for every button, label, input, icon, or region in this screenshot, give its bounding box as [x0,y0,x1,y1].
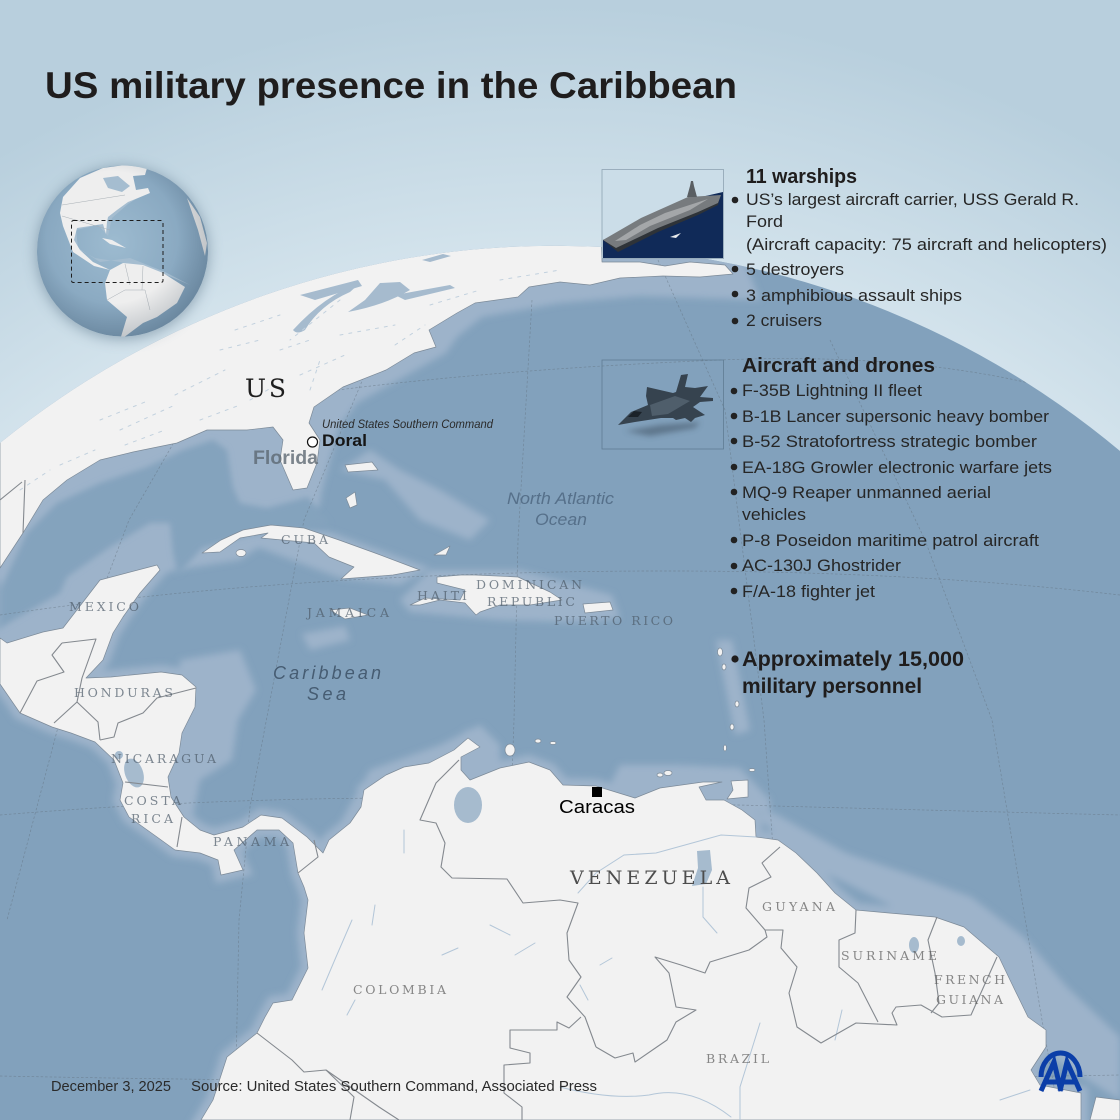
footer date and source: Source: United States Southern Command, Associated Press [191,1079,597,1095]
marker: Doral, United States Southern Command [308,419,494,450]
warship list: (Aircraft capacity: 75 aircraft and helicopters) [746,235,1107,254]
Trinidad [727,780,748,799]
aircraft list: AC-130J Ghostrider [742,556,901,575]
Hispaniola [410,575,562,615]
heading: 11 warships [746,166,857,188]
label: Dominican Republic: REPUBLIC [487,594,575,609]
label: Haiti: HAITI [417,588,467,603]
label: French Guiana: GUIANA [936,992,1004,1007]
marker: Doral, United States Southern Command: Doral [322,432,367,450]
callout: personnel: Approximately 15,000 [742,648,964,671]
Puerto Rico [583,602,613,613]
panel: warships [602,166,1107,330]
rivers and small lakes [20,270,1030,1120]
label: French Guiana [934,972,1005,1007]
warship list: 5 destroyers [746,260,844,279]
label: French Guiana: FRENCH [934,972,1005,987]
inset locator globe [36,165,208,340]
label: US: US [245,374,286,403]
graticule [0,260,1120,1120]
callout: personnel: military personnel [742,675,922,698]
aircraft list: EA-18G Growler electronic warfare jets [742,458,1052,477]
label: Costa Rica: COSTA [124,793,182,808]
footer date and source: December 3, 2025 [51,1079,171,1095]
aircraft list: F/A-18 fighter jet [742,582,875,601]
label: Dominican Republic [476,577,582,609]
label: Cuba: CUBA [281,532,329,547]
label: Brazil: BRAZIL [706,1051,769,1066]
deep Gulf of Mexico basin [0,440,330,628]
landmass: Central and South America [0,565,1081,1120]
globe shadow [36,167,208,339]
warship list: 3 amphibious assault ships [746,286,962,305]
islands [202,462,1120,1120]
label: Caribbean Sea: Sea [307,684,346,704]
label: Honduras: HONDURAS [74,685,173,700]
warship list: 2 cruisers [746,311,822,330]
heading: Aircraft and drones [742,355,935,377]
label: Puerto Rico: PUERTO RICO [554,613,673,628]
title: US military presence in the Caribbean [45,65,737,106]
lakes [115,254,965,953]
Marajo island [1090,1097,1120,1120]
aircraft list: B-1B Lancer supersonic heavy bomber [742,407,1049,426]
label: Colombia: COLOMBIA [353,982,447,997]
warship list: Ford [746,212,783,231]
label: Costa Rica: RICA [131,811,174,826]
label: Guyana: GUYANA [762,899,836,914]
aircraft list: P-8 Poseidon maritime patrol aircraft [742,531,1039,550]
warship list [732,190,1107,330]
Jamaica [330,608,368,619]
fighter jet photo [602,360,724,449]
marker: Doral, United States Southern Command: United States Southern Command [322,419,494,431]
aircraft list: vehicles [742,505,806,524]
aircraft list [731,381,1052,601]
label: Mexico: MEXICO [69,599,139,614]
label: Suriname: SURINAME [841,948,937,963]
warship list: US’s largest aircraft carrier, USS Gerald R. [746,190,1079,209]
marker: Caracas: Caracas [559,797,635,817]
label: Panama: PANAMA [213,834,290,849]
marker: Caracas [559,787,635,817]
label: Costa Rica [124,793,182,826]
country borders [0,480,997,1120]
label: North Atlantic Ocean [507,489,615,529]
label: Jamaica: JAMAICA [305,605,390,620]
label: Venezuela: VENEZUELA [569,867,730,889]
aircraft list: F-35B Lightning II fleet [742,381,922,400]
logo: AA [1041,1053,1080,1091]
carrier photo [602,170,724,258]
deep ocean [0,240,1120,1120]
Cuba [202,525,420,579]
label: Nicaragua: NICARAGUA [111,751,217,766]
small islands and Bahamas [236,550,246,556]
landmass: North America [0,246,734,568]
label: Caribbean Sea [273,663,381,704]
label: North Atlantic Ocean: Ocean [535,510,587,529]
map labels [69,374,1005,1066]
label: Florida: Florida [253,448,318,469]
label: Caribbean Sea: Caribbean [273,663,381,683]
aircraft list: B-52 Stratofortress strategic bomber [742,432,1037,451]
dashed locator rectangle [72,220,163,282]
label: North Atlantic Ocean: North Atlantic [507,489,615,508]
panel: aircraft and drones [602,355,1052,601]
aircraft list: MQ-9 Reaper unmanned aerial [742,483,991,502]
callout: personnel [731,648,964,698]
label: Dominican Republic: DOMINICAN [476,577,582,592]
